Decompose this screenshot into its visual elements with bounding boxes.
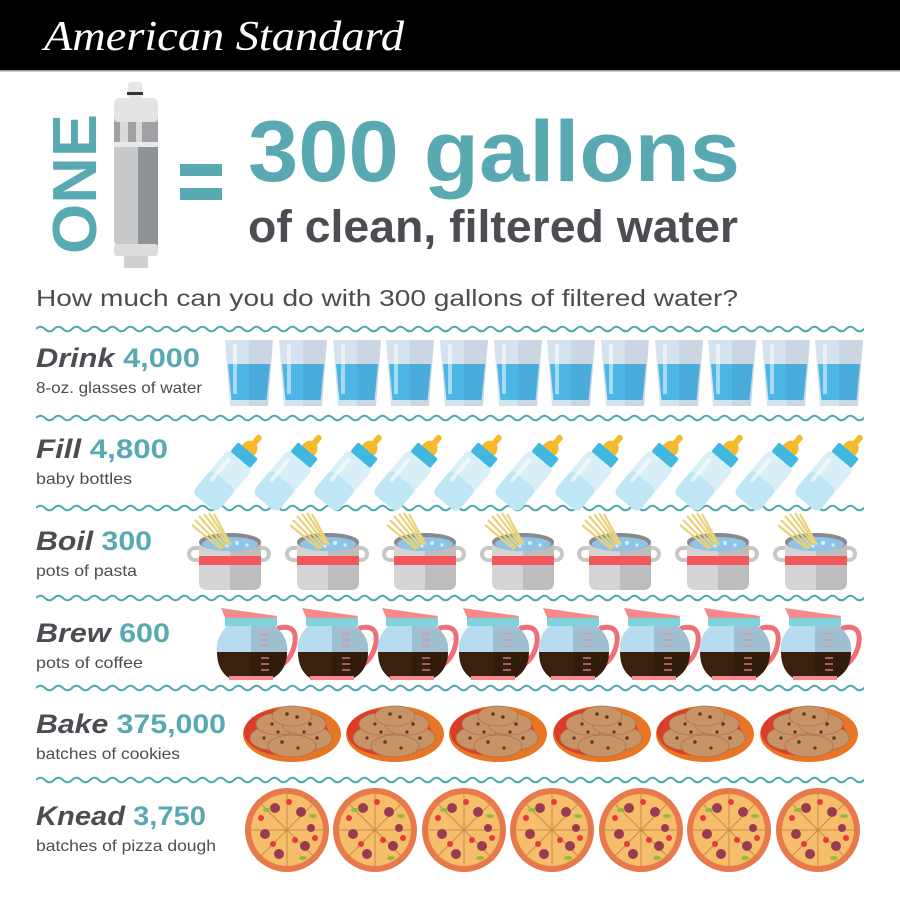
row: bake — [36, 706, 858, 763]
row: fill — [36, 425, 874, 513]
row: fill: Fill 4,800 — [36, 434, 168, 464]
row: drink — [36, 340, 863, 406]
icons: baby bottles — [192, 425, 874, 513]
icons: pizzas — [245, 788, 860, 872]
question: How much can you do with 300 gallons of filtered water? — [36, 285, 738, 311]
row: knead: batches of pizza dough — [36, 838, 216, 855]
row: knead: Knead 3,750 — [36, 801, 206, 831]
row: knead — [36, 788, 860, 872]
headline: 300 gallons: 300 gallons — [248, 104, 740, 200]
row: brew: pots of coffee — [36, 655, 143, 672]
row: bake: Bake 375,000 — [36, 709, 226, 739]
ONE vertical: ONE — [41, 114, 110, 254]
row: drink: Drink 4,000 — [36, 343, 200, 373]
row: drink: 8-oz. glasses of water — [36, 380, 203, 397]
header bar — [0, 0, 900, 72]
wave dividers — [36, 327, 882, 782]
icons: coffee pots — [217, 608, 859, 680]
row: bake: batches of cookies — [36, 746, 180, 763]
row: boil — [36, 513, 855, 590]
logo: American Standard — [41, 14, 405, 60]
row: brew: Brew 600 — [36, 618, 170, 648]
row: boil: pots of pasta — [36, 563, 137, 580]
row: fill: baby bottles — [36, 471, 132, 488]
icons: pasta pots — [189, 513, 855, 590]
equals sign — [180, 164, 222, 200]
icons: cookie plates — [243, 706, 858, 762]
icons: glasses — [225, 340, 863, 406]
row: brew — [36, 608, 859, 680]
icon: filter cartridge — [114, 82, 158, 268]
subheadline: of clean, filtered water — [248, 201, 738, 252]
row: boil: Boil 300 — [36, 526, 152, 556]
